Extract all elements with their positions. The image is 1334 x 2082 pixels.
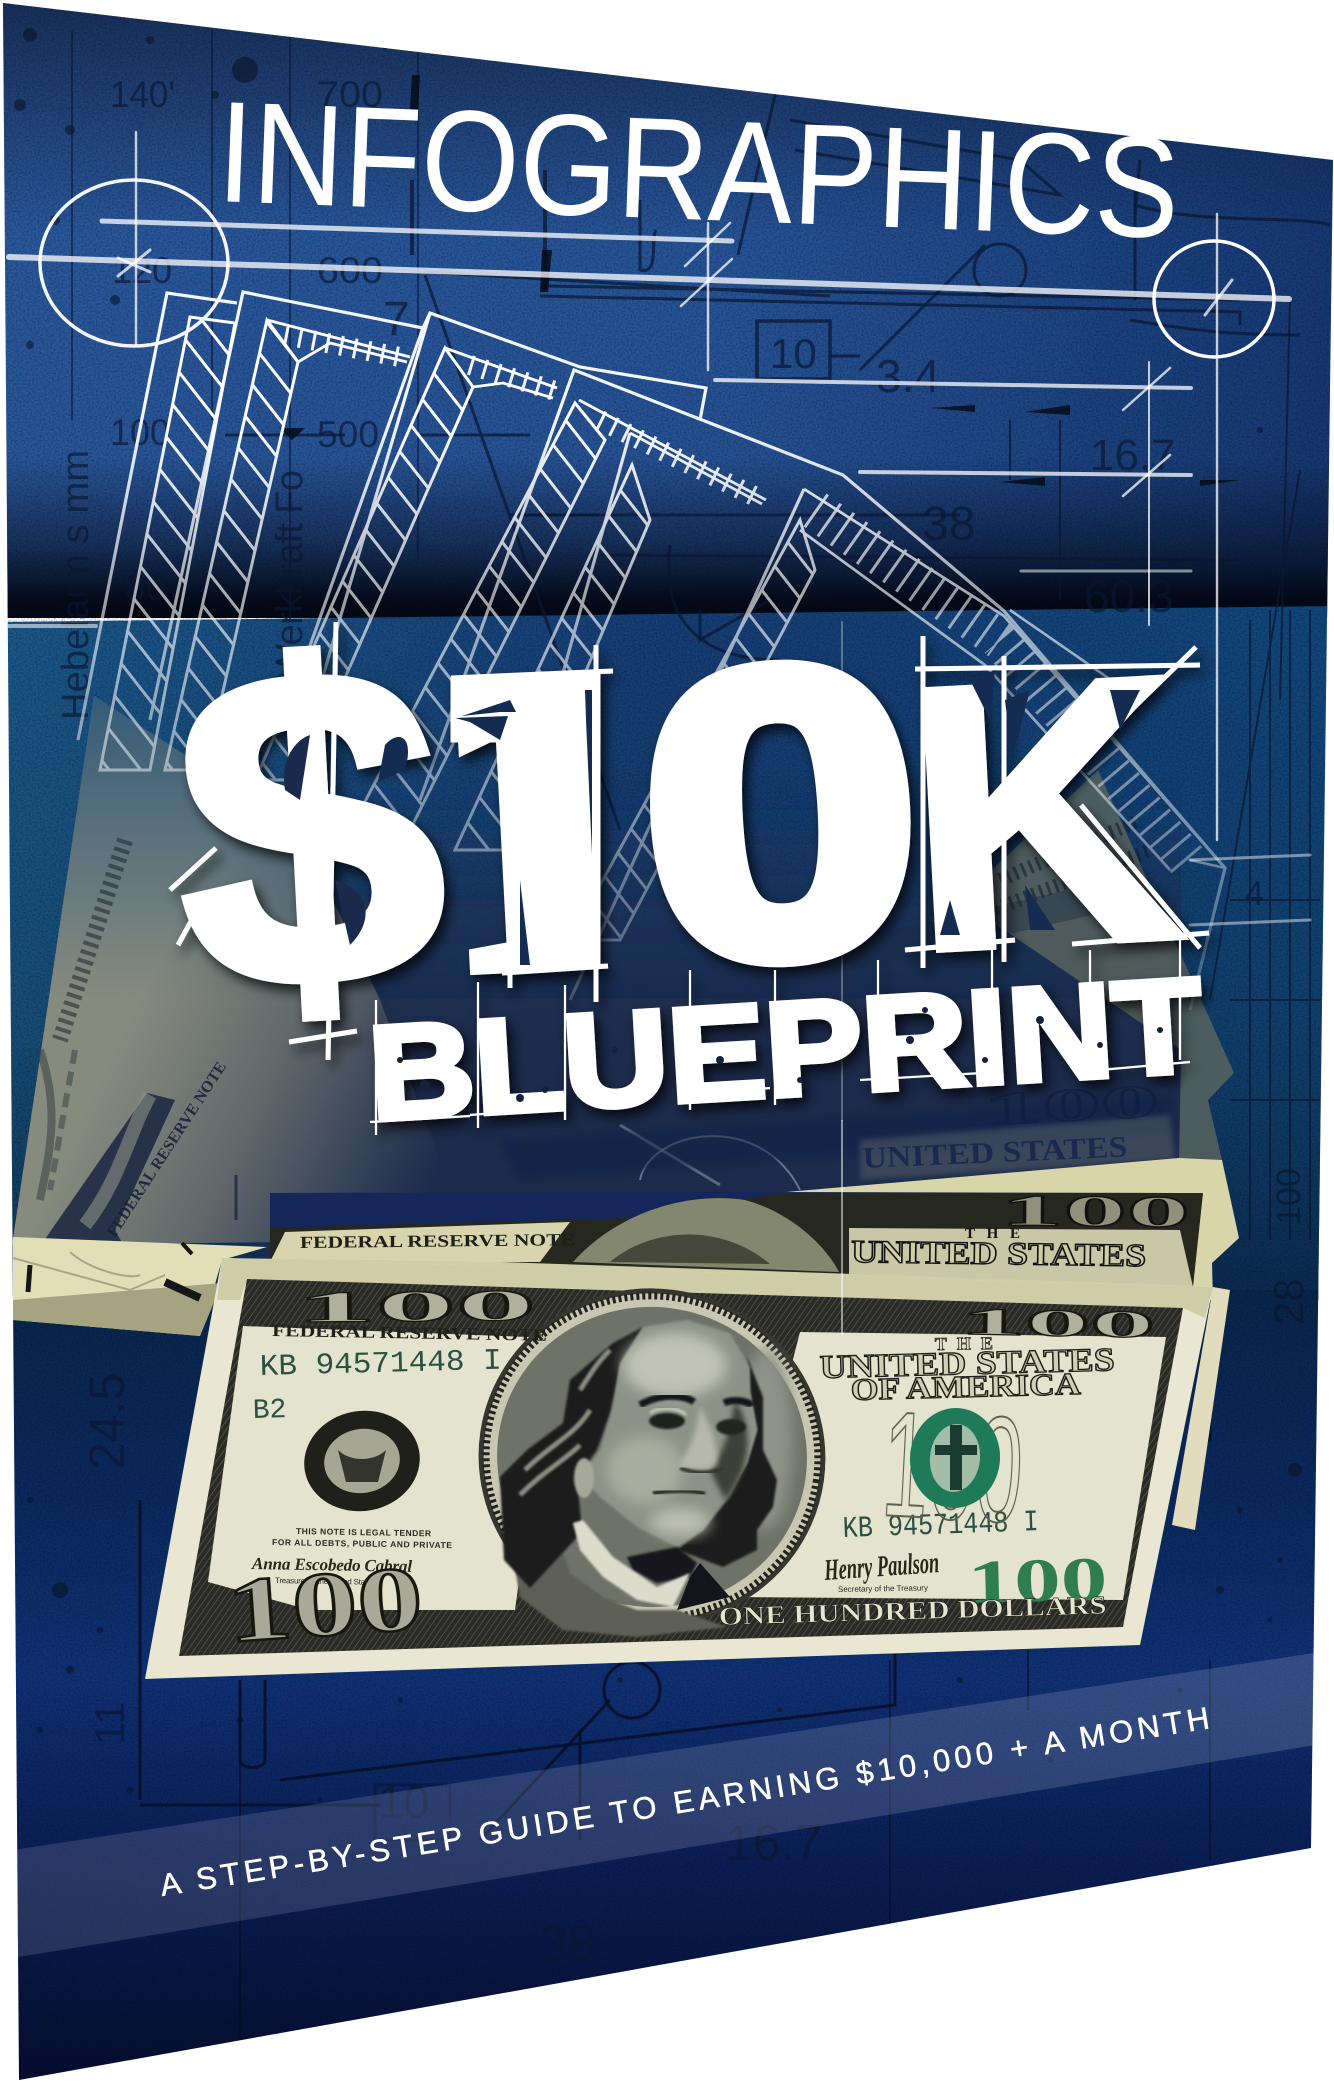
serial and note text: KB 94571448 I bbox=[842, 1506, 1039, 1547]
blueprint numbers: 16.7 bbox=[1090, 431, 1176, 480]
right dark hair bbox=[677, 1357, 777, 1567]
serial and note text: FEDERAL RESERVE NOTE bbox=[272, 1321, 547, 1345]
blueprint numbers: 4 bbox=[1245, 875, 1264, 913]
serial and note text bbox=[251, 1321, 1039, 1594]
blueprint numbers: 10 bbox=[770, 330, 817, 377]
BLUEPRINT surface chips bbox=[397, 1007, 1163, 1102]
green 100: 100 bbox=[967, 1545, 1108, 1617]
united states of america heading bbox=[819, 1333, 1115, 1407]
cheek light bbox=[607, 1436, 683, 1504]
upper note print bbox=[270, 1193, 1203, 1290]
bill printed border bbox=[179, 1279, 1183, 1656]
white construction lines and circles bbox=[8, 132, 1310, 1120]
united states of america heading: UNITED STATES bbox=[819, 1342, 1115, 1386]
federal reserve strip bbox=[270, 1222, 570, 1262]
faint vertical ruler line bbox=[841, 1120, 843, 1335]
serial and note text: Henry Paulson bbox=[823, 1546, 940, 1587]
one hundred dollars: ONE HUNDRED DOLLARS bbox=[718, 1590, 1107, 1631]
blueprint numbers: Werkkraft Fo bbox=[269, 470, 311, 680]
upper portrait bbox=[573, 1198, 839, 1272]
lower blueprint background bbox=[0, 1290, 1334, 2082]
blueprint numbers: 80 bbox=[125, 567, 166, 608]
blueprint numbers: 500 bbox=[317, 414, 379, 455]
banknote stack behind: UNITED STATES bbox=[851, 1233, 1146, 1273]
lower olive shade bbox=[13, 1283, 222, 1336]
serial and note text: Treasurer of the United States bbox=[275, 1576, 375, 1587]
ghost banknote details: 100 bbox=[983, 1075, 1160, 1135]
serial and note text: FOR ALL DEBTS, PUBLIC AND PRIVATE bbox=[272, 1537, 452, 1550]
outer frames bbox=[78, 292, 1225, 1010]
blueprint numbers: 3.4 bbox=[876, 350, 940, 402]
banknote stack behind: THE bbox=[965, 1226, 1020, 1242]
bill paper bbox=[145, 1258, 1213, 1679]
serial and note text: B2 bbox=[252, 1395, 287, 1427]
digit zero: 0 bbox=[631, 579, 930, 1046]
folded note marks bbox=[28, 1265, 30, 1292]
right note field bbox=[732, 1332, 1166, 1600]
collar bbox=[573, 1520, 690, 1607]
serial and note text: KB 94571448 I bbox=[259, 1345, 502, 1385]
letter K: K bbox=[896, 596, 1191, 1032]
blueprint numbers: 11 bbox=[86, 1701, 133, 1745]
blueprint numbers: 10 bbox=[378, 1776, 429, 1828]
blueprint numbers: 38 bbox=[922, 498, 975, 551]
upper 100 left: 100 bbox=[296, 1281, 536, 1332]
lower dark blueprint drawing bbox=[140, 1270, 1210, 2040]
banknote stack behind: FEDERAL RESERVE NOTE bbox=[300, 1230, 575, 1252]
blueprint numbers: 24.5 bbox=[79, 1373, 135, 1470]
INFOGRAPHICS heading: INFOGRAPHICS bbox=[215, 71, 1182, 269]
black coat triangle bbox=[677, 1563, 730, 1610]
title surface chips bbox=[284, 670, 1140, 965]
watermark 100 with green seal bbox=[878, 1379, 1027, 1554]
left treasury seal bbox=[296, 1402, 428, 1520]
mouth bbox=[653, 1491, 705, 1494]
middle blueprint background bbox=[0, 606, 1334, 1300]
ghost banknote details: UNITED STATES bbox=[862, 1130, 1128, 1175]
blueprint numbers: 100 bbox=[1270, 1168, 1308, 1225]
large lower 100: 100 bbox=[223, 1547, 426, 1662]
left note field bbox=[208, 1326, 553, 1610]
dollar sign: $ bbox=[166, 574, 454, 1084]
face bbox=[580, 1320, 757, 1547]
banknote stack behind bbox=[13, 1158, 1239, 1336]
upper cream field bbox=[849, 1228, 1193, 1287]
bills behind right edge bbox=[1172, 1287, 1230, 1530]
left dark hair bbox=[500, 1327, 643, 1588]
blueprint numbers: 28 bbox=[1265, 1278, 1312, 1325]
upper blueprint background bbox=[0, 0, 1334, 618]
blueprint numbers: 700 bbox=[317, 74, 383, 115]
ghost banknote details: FEDERAL RESERVE NOTE bbox=[104, 1059, 230, 1240]
upper 100 right: 100 bbox=[960, 1301, 1156, 1346]
main hundred dollar bill bbox=[145, 1258, 1230, 1679]
subtitle BLUEPRINT: BLUEPRINT bbox=[365, 951, 1206, 1149]
banknote stack behind: 100 bbox=[1000, 1186, 1190, 1237]
portrait oval bbox=[460, 1269, 844, 1645]
shaded top margin bbox=[217, 1258, 1213, 1318]
ghost banknote centre bbox=[248, 842, 1181, 1258]
hair highlights bbox=[520, 1350, 610, 1495]
main title $10K bbox=[166, 574, 1209, 1084]
bottom band bbox=[0, 1650, 1334, 1960]
ghost banknote details bbox=[40, 820, 1175, 1275]
ear bbox=[574, 1458, 594, 1498]
blueprint numbers: Hebelarm s mm bbox=[55, 450, 97, 720]
serial and note text: Anna Escobedo Cabral bbox=[251, 1554, 413, 1576]
upper note navy overlay bbox=[270, 1192, 786, 1228]
blueprint numbers: 38 bbox=[540, 1915, 596, 1971]
united states of america heading: THE bbox=[935, 1333, 993, 1354]
nose bbox=[678, 1405, 717, 1470]
hatched top bands bbox=[267, 320, 1225, 870]
ghost banknote left bbox=[12, 696, 470, 1245]
forehead light bbox=[623, 1333, 727, 1397]
right face shade bbox=[710, 1400, 747, 1500]
brows and eyes bbox=[640, 1396, 752, 1406]
blueprint numbers: 120 bbox=[112, 250, 172, 291]
cream wedge right bbox=[786, 1158, 1239, 1300]
hatched left bands bbox=[100, 317, 815, 940]
dark blueprint drawing bbox=[72, 30, 1330, 1240]
united states of america heading: OF AMERICA bbox=[850, 1366, 1082, 1407]
serial and note text: THIS NOTE IS LEGAL TENDER bbox=[296, 1526, 431, 1538]
blueprint numbers: 16.7 bbox=[725, 1815, 822, 1871]
neck shadow bbox=[627, 1547, 697, 1583]
ghost banknote right bbox=[992, 770, 1234, 1160]
blueprint numbers: 100 bbox=[110, 412, 170, 453]
tagline: A STEP-BY-STEP GUIDE TO EARNING $10,000 + A MONTH bbox=[158, 1700, 1212, 1903]
blueprint numbers: 60.3 bbox=[1084, 570, 1174, 622]
hatched banknote outlines bbox=[78, 292, 1225, 1010]
watermark 100 with green seal: 100 bbox=[878, 1379, 1027, 1554]
digit one: 1 bbox=[426, 582, 619, 1066]
title construction lines bbox=[170, 622, 1209, 1060]
black arrowheads bbox=[280, 75, 1240, 486]
coat bbox=[513, 1537, 727, 1637]
left cream fold bbox=[13, 1237, 267, 1336]
blueprint numbers: 140' bbox=[110, 74, 175, 115]
blueprint numbers: 600 bbox=[317, 250, 383, 291]
serial and note text: Secretary of the Treasury bbox=[838, 1583, 928, 1594]
blueprint numbers: 7 bbox=[383, 293, 410, 346]
